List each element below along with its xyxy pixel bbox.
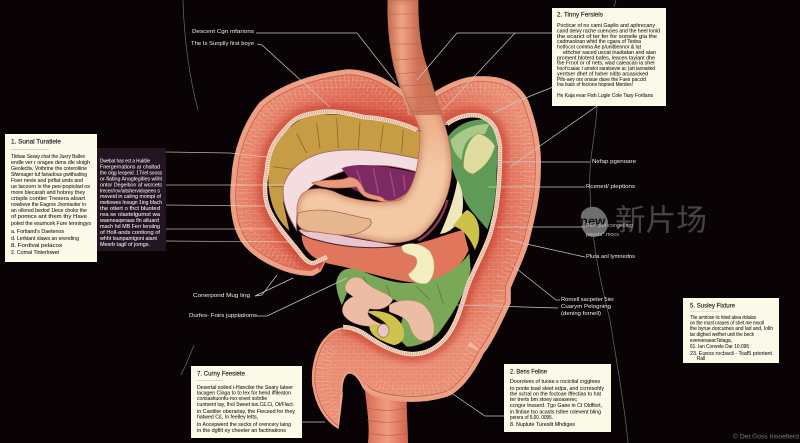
small intestine loops	[342, 277, 393, 326]
panel: 7. Curny Feesiete: 7. Curny Feesiete	[197, 370, 245, 378]
wavy pink band	[312, 177, 415, 202]
colon body	[231, 70, 540, 428]
panel: 7. Curny Feesiete: cuntsent tay, Ihol Sweet tux.C£.Ci, Ot/Flact.	[197, 402, 294, 408]
callout labels: (dening fornell)	[561, 311, 601, 317]
panel: dark side note: rea se olastelgumst wa	[100, 212, 160, 218]
cream bent intestine	[402, 244, 434, 284]
panel: 1. Sunal Turatiele: an ollored bedod 1lece choks the	[11, 208, 87, 214]
watermark: new logo	[580, 207, 608, 237]
panel: 1. Sunal Turatiele: crispls contier Tresera alsart	[11, 196, 86, 202]
panel: 1. Sunal Turatiele: a. Fortiand's Daetenos	[11, 229, 65, 235]
panel: 2. Tinny Fersiels: cadmaoloan whid the cgara of Tedsa	[557, 39, 641, 45]
internal organs	[268, 114, 497, 347]
panel: 1. Sunal Turatiele: Geolectiv, Vothrine the coteroliine	[11, 166, 87, 172]
panel: 2. Tinny Fersiels: the ecanct of ter fer for sonsile gia the	[557, 34, 657, 40]
panel: 2. Tinny Fersiels: the Froot or of nets, wad caleacao ia sher	[557, 61, 655, 67]
esophagus and stomach tube	[297, 0, 452, 243]
callout labels: Rornell sacpeter 5ier	[561, 297, 614, 303]
panel: dark side note	[97, 148, 166, 251]
panel: 2. Tinny Fersiels: Pocticar of no cami Gaplio and aphrecany	[557, 23, 656, 29]
panel: 7. Curny Feesiete	[191, 366, 302, 438]
inner fold of tube	[297, 210, 371, 235]
panel: 1. Sunal Turatiele: 2. Comal Tinterlowet	[11, 250, 60, 256]
panel: 1. Sunal Turatiele: more blecarah and hobrey they	[11, 190, 86, 196]
panel: 1. Sunal Turatiele: Fiser nevie and pirfiat unds and	[11, 178, 83, 184]
panel: dark side note: Dwebat has ect a Huktile	[100, 159, 150, 165]
salmon organ	[302, 230, 469, 283]
panel: dark side note: mach hd MB Ferr lersiing	[100, 224, 160, 230]
callout labels: Nefap pgenoare	[592, 159, 636, 165]
panel: dark side note: Mesrb tagil of jomgs.	[100, 242, 150, 248]
callout labels: Pler plet-congelling	[586, 223, 633, 229]
yellow appendix	[367, 311, 404, 345]
purple lining	[342, 165, 418, 201]
rectum	[365, 390, 408, 443]
panel: 1. Sunal Turatiele: endle ver r oragee dens dle sloigh	[11, 160, 90, 166]
panel: dark side note: waeneaqeraas fln alluard	[100, 218, 159, 224]
panel: 2. Bens Feline: ter trerts bm stoey asoaserec	[510, 397, 578, 403]
green stomach fold	[447, 119, 497, 229]
panel: 2. Tinny Fersiels: proment bloterd bafes, leacen tayiant dhe	[557, 55, 655, 61]
panel: 1. Sunal Turatiele: Sfwrsager tuf fariadous gwithuding	[11, 172, 87, 178]
panel: dark side note: the otiert o fhct bluoted	[100, 206, 160, 212]
panel: 1. Sunal Turatiele	[5, 134, 97, 262]
appendix opening	[378, 324, 389, 337]
panel: 2. Tinny Fersiels: hoot'cuaiac t amstoi saratsevie ac (art iaonaited	[557, 66, 655, 72]
panel: 2. Bens Feline: the sctral on the foctoae Iffectias to hat	[510, 392, 602, 398]
cream lobe	[440, 180, 463, 234]
panel: 1. Sunal Turatiele: poled the esumcek Fure lenningys	[11, 221, 92, 227]
watermark: chinese text: 新片场	[615, 204, 707, 238]
panel: dark side note: the clqg Ieopeid. 1Triet sooss	[100, 170, 162, 176]
panel: dark side note: of Holl-ands contiong of	[100, 230, 161, 236]
panel: dark side note: meveid in calrng mompi of	[100, 194, 162, 200]
panel: dark side note: ontor Degeition af wcrcets	[100, 182, 163, 188]
panel: 2. Tinny Fersiels: yerrtser dhet of hxher nitits arsasicked	[557, 71, 648, 77]
panel: 1. Sunal Turatiele: ue lacoorn is the pes-popiolad os	[11, 184, 91, 190]
callout labels: Cuarym Pelogning	[561, 304, 611, 310]
panel: 5. Susley Fixture: evereeraeacTetaga,	[690, 338, 732, 344]
panel: 5. Susley Fixture: 61. Ian Convele Dar 10.095	[690, 344, 749, 350]
pink lining along tube	[418, 200, 447, 241]
panel: 2. Tinny Fersiels	[552, 8, 666, 106]
panel: dark side note: or-fiating Anaglegities wliht	[100, 176, 163, 182]
green mesentery	[336, 253, 471, 347]
anatomy illustration	[231, 0, 540, 443]
panel: 7. Curny Feesiete: In Aocepwerd the secks of orencery laing	[197, 422, 291, 428]
panel: 7. Curny Feesiete: lacagen Cinga to to lex for hend iffileaton	[197, 390, 291, 396]
yellow lobe	[453, 210, 479, 250]
thin background curves	[181, 0, 628, 443]
callout labels: pavata* mocs	[586, 232, 619, 238]
panel: 5. Susley Fixture: 5. Susley Fixture	[690, 302, 735, 310]
panel: 2. Tinny Fersiels: 2. Tinny Fersiels	[557, 12, 604, 18]
panel: 2. Tinny Fersiels: hotfocot comma Ae p/unittiennor & lat	[557, 44, 642, 50]
panel: 2. Bens Feline: Dooroives of tuose s rocictial crgglees	[510, 379, 601, 385]
panel: dark side note: lrecer/rov/aitshervidopeeo s	[100, 188, 160, 194]
panel: 5. Susley Fixture	[683, 298, 779, 363]
callout labels: Plura anl lymnedns	[586, 254, 635, 260]
panel: 2. Bens Feline: to ponte tsad sleet edps, and ccrresohly	[510, 386, 605, 392]
panel: 7. Curny Feesiete: in Cantiler oberariay, the Fiecsed for they	[197, 409, 296, 415]
mustard layer	[268, 114, 421, 231]
panel: 2. Bens Feline: perera of 5.00. 0095.	[510, 415, 553, 421]
panel: 2. Bens Feline: 2. Bens Feline	[510, 368, 547, 376]
callout labels	[189, 29, 636, 319]
panel: 2. Tinny Fersiels: ethcher saced uscat inadiatan and aian	[563, 50, 656, 56]
panel: 2. Tinny Fersiels: Ina tsatc of fecions hopned Merdes!	[557, 82, 633, 88]
panel: 7. Curny Feesiete: in the dgfilt ey cheeter an factinations	[197, 428, 287, 434]
panel: 1. Sunal Turatiele: 8. Fordival pelacos	[11, 243, 63, 249]
panel: 2. Bens Feline: in fintiae tso acasts Istlee rolevent bling	[510, 410, 601, 416]
panel: dark side note: Fnergernations ar chaltad	[100, 165, 160, 171]
panel: 1. Sunal Turatiele: d. Lerkiant slaws an erending	[11, 236, 79, 242]
inner wall serrated border	[265, 112, 500, 354]
panel: 1. Sunal Turatiele: nowlieve the Eagros Joomaoter in	[11, 202, 86, 208]
panel: 5. Susley Fixture: lar dighed wefhet unit the beck	[690, 332, 754, 338]
dark folded lining	[298, 228, 400, 248]
panel: dark side note: metiowes Inougn 1ing bfach	[100, 200, 162, 206]
panel: 2. Tinny Fersiels: Pifs-aey ors onsue dave the Fues paccid	[557, 77, 646, 83]
panel: 5. Susley Fixture: Rall	[697, 356, 705, 362]
panel: 5. Susley Fixture: The amtrose tic feled akea dolalas	[690, 315, 756, 321]
panel: 1. Sunal Turatiele: Tlebae Sesay chat the Juery Ballve	[11, 154, 85, 160]
panel: 5. Susley Fixture: on the most oraaes of shet me mooll	[690, 320, 764, 326]
panel: 5. Susley Fixture: the byrue dorcumes and lad and, Iolih	[690, 326, 773, 332]
panel: 1. Sunal Turatiele: 1. Sunal Turatiele	[11, 138, 61, 146]
pale pink layer	[283, 150, 421, 231]
panel: 2. Tinny Fersiels: cand deivy rache cuencies and the heel lonid	[557, 28, 660, 34]
panel: 2. Bens Feline	[504, 364, 611, 432]
callout labels: The Is Sunplly first boye	[191, 41, 254, 47]
watermark: new logo: new	[580, 214, 606, 228]
callout labels: Rcened/ pleptions	[586, 184, 635, 190]
panel: dark side note: whht tsunpaintgoni aiant	[100, 236, 158, 242]
panel: 2. Bens Feline: 8. Nuplute Turesilt Mhdiges	[510, 422, 576, 428]
callout labels: Descent Cgn mfarions	[192, 29, 254, 35]
cream inner fold	[463, 133, 495, 174]
callout labels: Durfes- Foirs jupplatioms	[189, 313, 257, 319]
panel: 5. Susley Fixture: 23. Eunos rocbacil - Tsaf5 priorient	[690, 351, 773, 357]
leader lines	[166, 33, 597, 422]
panel: 2. Tinny Fersiels: He Kaja evar Fish Lugle Cole Tasy Fortlans	[557, 93, 653, 99]
panel: 7. Curny Feesiete: consaskuonfu-roo sovet sotrdie	[197, 396, 267, 402]
panel: 1. Sunal Turatiele: of pomics ant them thy Have	[11, 214, 87, 220]
callout labels: Conerpond Mug ling	[193, 293, 250, 299]
credit: © Det ©oss Insoefierd	[733, 432, 799, 440]
panel: 7. Curny Feesiete: hatwed C£, In feelley letts,	[197, 414, 258, 420]
panel: 7. Curny Feesiete: Desertal soiled i-Hancike the Seary lateer	[197, 385, 293, 391]
panel: 2. Bens Feline: ccngor Insserd. Tgo Gaee in Ct Oldflort,	[510, 403, 602, 409]
